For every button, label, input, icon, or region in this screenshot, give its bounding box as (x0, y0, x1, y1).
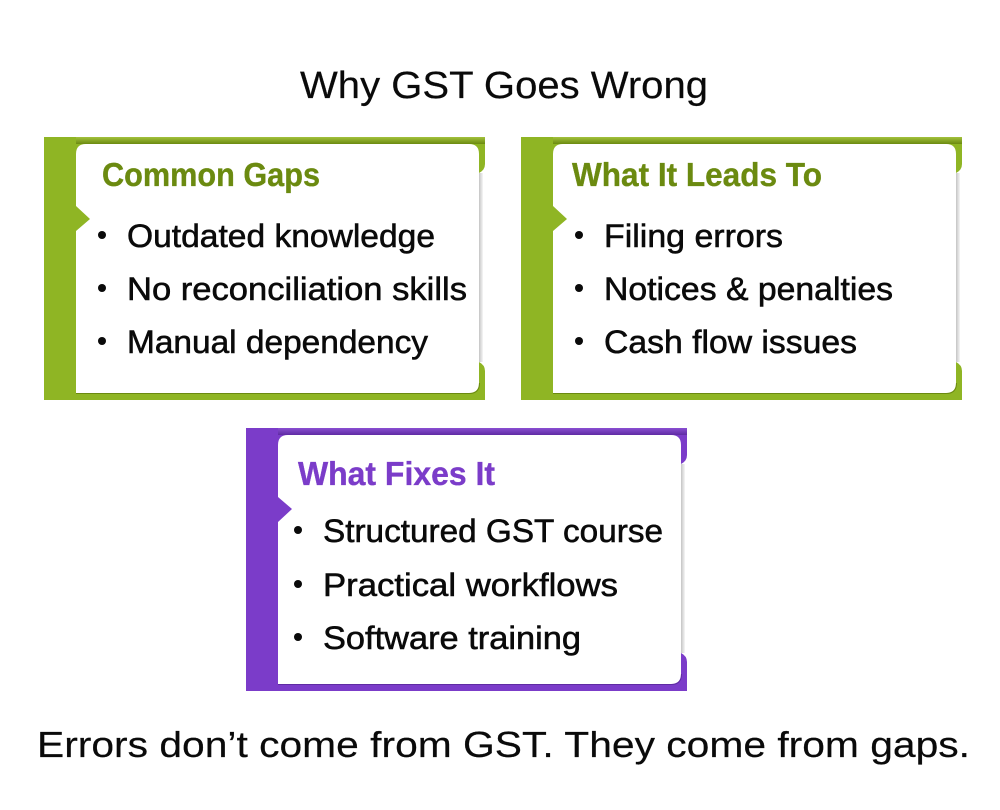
list item: Cash flow issues (604, 324, 857, 360)
list item: Practical workflows (323, 567, 618, 603)
panel: what it leads to (521, 137, 962, 400)
panel frame (246, 428, 687, 691)
heading: What Fixes It (298, 455, 495, 492)
list item: No reconciliation skills (127, 271, 467, 307)
list item: Structured GST course (323, 513, 663, 549)
panel: what fixes it (246, 428, 687, 691)
list item: Software training (323, 620, 581, 656)
panel: common gaps (44, 137, 485, 400)
panel frame (44, 137, 485, 400)
panel frame (521, 137, 962, 400)
title: Why GST Goes Wrong (300, 65, 708, 107)
list item: Filing errors (604, 218, 783, 254)
list item: Manual dependency (127, 324, 428, 360)
list item: Outdated knowledge (127, 218, 435, 254)
list item: Notices & penalties (604, 271, 893, 307)
heading: What It Leads To (572, 156, 822, 193)
closing statement: Errors don’t come from GST. They come from gaps. (37, 724, 970, 765)
heading: Common Gaps (102, 156, 320, 193)
